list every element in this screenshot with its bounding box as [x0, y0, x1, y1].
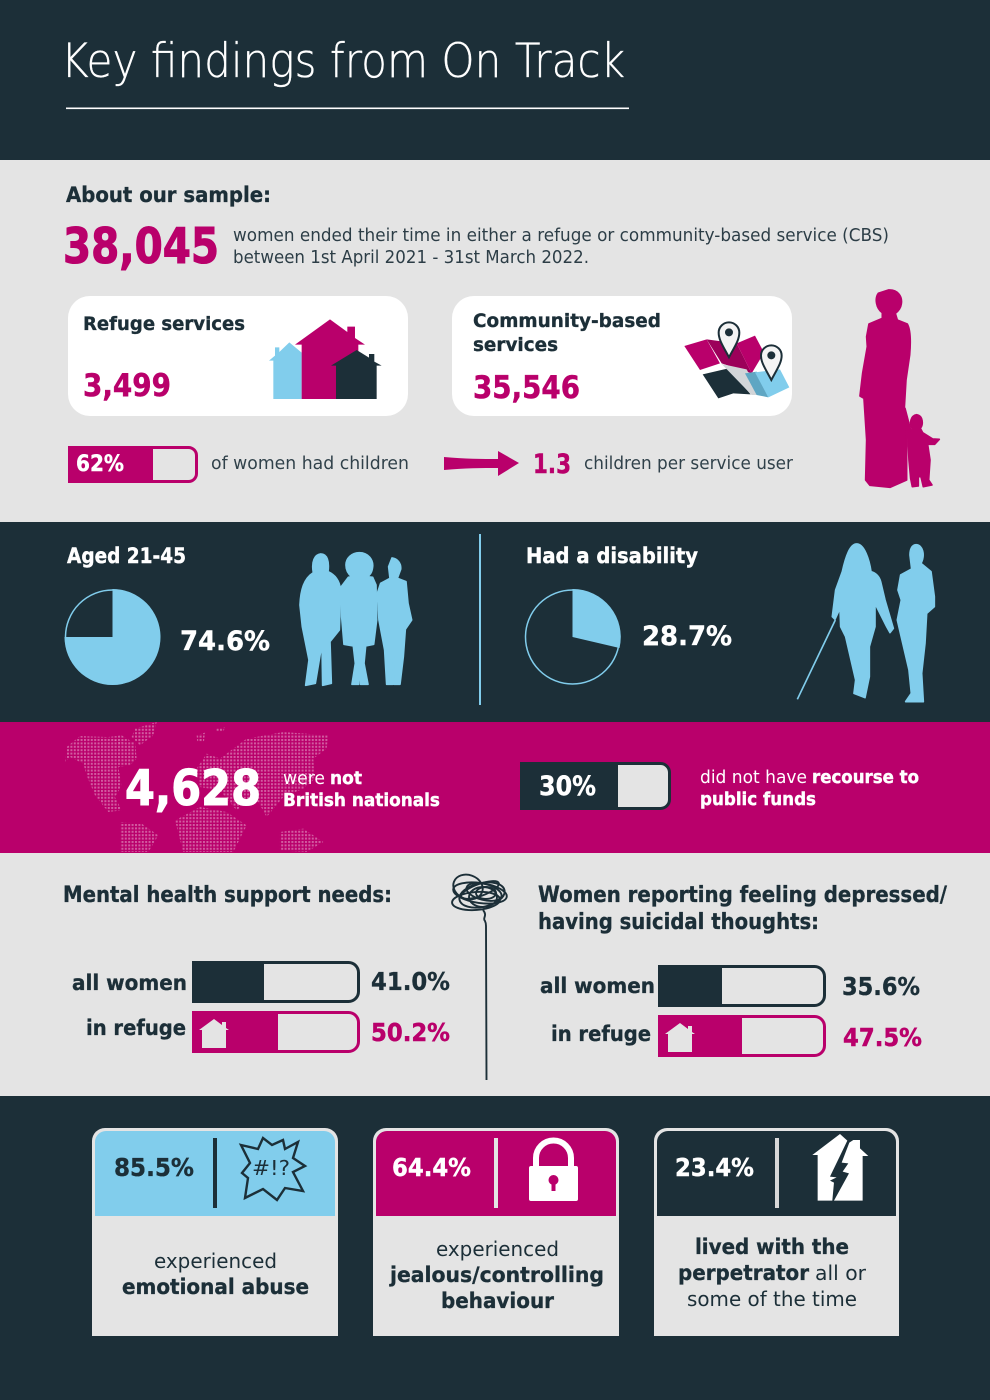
chart: depression bars: all women	[540, 974, 655, 998]
pie chart: 74.6%	[64, 589, 160, 685]
panel: mental health	[0, 853, 990, 1096]
icon: three women silhouette	[300, 553, 412, 685]
heading: about our sample: About our sample:	[66, 183, 271, 207]
icon: woman and child silhouette	[860, 290, 939, 487]
label: of women had children: of women had children	[211, 453, 409, 474]
card: lived with perpetrator	[654, 1128, 899, 1336]
icon: angry speech burst	[241, 1138, 305, 1200]
card: jealous/controlling behaviour: 64.4%	[392, 1153, 471, 1182]
header band	[0, 0, 990, 160]
card: lived with perpetrator: lived with the	[695, 1235, 849, 1259]
stat: 4,628: 4,628	[125, 760, 261, 817]
heading: aged 21-45: Aged 21-45	[67, 544, 186, 568]
big number 38,045: 38,045	[63, 218, 219, 275]
text: were not British nationals	[283, 768, 440, 811]
text: recourse to public funds	[700, 767, 919, 810]
card: emotional abuse: experienced	[154, 1249, 277, 1273]
stat: 1.3: 1.3	[533, 449, 571, 480]
card: community-based services: Community-based	[473, 310, 661, 332]
bar: 30% no recourse: 30%	[539, 771, 596, 802]
icon: map with pins	[684, 322, 789, 398]
card: jealous/controlling behaviour	[373, 1128, 619, 1336]
chart: depression bars: in refuge	[551, 1022, 651, 1046]
text: were not British nationals: British nationals	[283, 790, 440, 811]
card: refuge services	[68, 296, 408, 416]
card: jealous/controlling behaviour: experienced	[436, 1237, 559, 1261]
icon: padlock	[529, 1141, 578, 1201]
bar: 62% had children: 62%	[76, 452, 124, 477]
heading: depressed or suicidal: Women reporting feeling depressed/	[538, 883, 948, 908]
icon: house with lightning crack	[812, 1134, 868, 1201]
panel: abuse statistics	[0, 1096, 990, 1400]
sample description: women ended their time in either a refuge or community-based service (CBS)	[233, 225, 889, 246]
card: lived with perpetrator: perpetrator	[678, 1261, 810, 1285]
chart: mental health bars: all women	[72, 971, 187, 995]
label: children per service user: children per service user	[584, 453, 794, 474]
card: lived with perpetrator: some of the time	[687, 1287, 857, 1311]
chart: depression bars: 35.6%	[842, 972, 920, 1001]
text: were not British nationals: not	[330, 768, 362, 789]
world map dots	[65, 722, 328, 852]
arrow	[444, 451, 519, 476]
icon: woman with cane and companion	[797, 544, 934, 702]
card: lived with perpetrator: all or	[815, 1261, 867, 1285]
card: jealous/controlling behaviour: behaviour	[441, 1289, 555, 1313]
card: community-based services: 35,546	[473, 370, 580, 406]
title: Key findings from On Track	[61, 34, 625, 89]
icon: three houses	[269, 319, 382, 399]
chart: mental health bars	[72, 961, 450, 1053]
bar: 30% no recourse	[520, 762, 670, 810]
card: community-based services: services	[473, 334, 558, 356]
card: refuge services: 3,499	[83, 368, 171, 404]
chart: depression bars: 47.5%	[843, 1023, 922, 1052]
panel: age and disability	[0, 522, 990, 722]
stat: 28.7%: 28.7%	[642, 621, 732, 652]
card: refuge services: Refuge services	[83, 313, 245, 335]
card: emotional abuse: 85.5%	[114, 1153, 194, 1182]
stat: 74.6%: 74.6%	[180, 626, 270, 657]
card: lived with perpetrator: 23.4%	[675, 1153, 754, 1182]
text: were not British nationals: were	[283, 768, 325, 789]
chart: mental health bars: in refuge	[86, 1016, 186, 1040]
panel: about our sample	[0, 160, 990, 522]
card: emotional abuse	[92, 1128, 338, 1336]
sample description: between 1st April 2021 - 31st March 2022.	[233, 247, 589, 268]
bar: 62% had children	[68, 446, 196, 483]
panel: nationality and public funds	[0, 722, 990, 853]
card: jealous/controlling behaviour: jealous/controlling	[389, 1263, 604, 1287]
text: recourse to public funds: did not have	[700, 767, 807, 788]
pie chart: 28.7%	[526, 589, 621, 684]
heading: depressed or suicidal	[538, 883, 948, 935]
sample description	[233, 225, 889, 268]
text: recourse to public funds: recourse to	[812, 767, 919, 788]
chart: mental health bars: 50.2%	[371, 1018, 450, 1047]
icon: angry speech burst: #!?	[252, 1156, 290, 1180]
heading: depressed or suicidal: having suicidal thoughts:	[538, 910, 819, 935]
icon: scribble line	[450, 871, 508, 1080]
chart: depression bars	[540, 965, 922, 1057]
heading: mental health support needs: Mental health support needs:	[63, 883, 392, 908]
heading: had a disability: Had a disability	[526, 544, 698, 568]
text: recourse to public funds: public funds	[700, 789, 816, 810]
chart: mental health bars: 41.0%	[371, 967, 450, 996]
card: emotional abuse: emotional abuse	[122, 1275, 309, 1299]
card: community-based services	[452, 296, 792, 416]
